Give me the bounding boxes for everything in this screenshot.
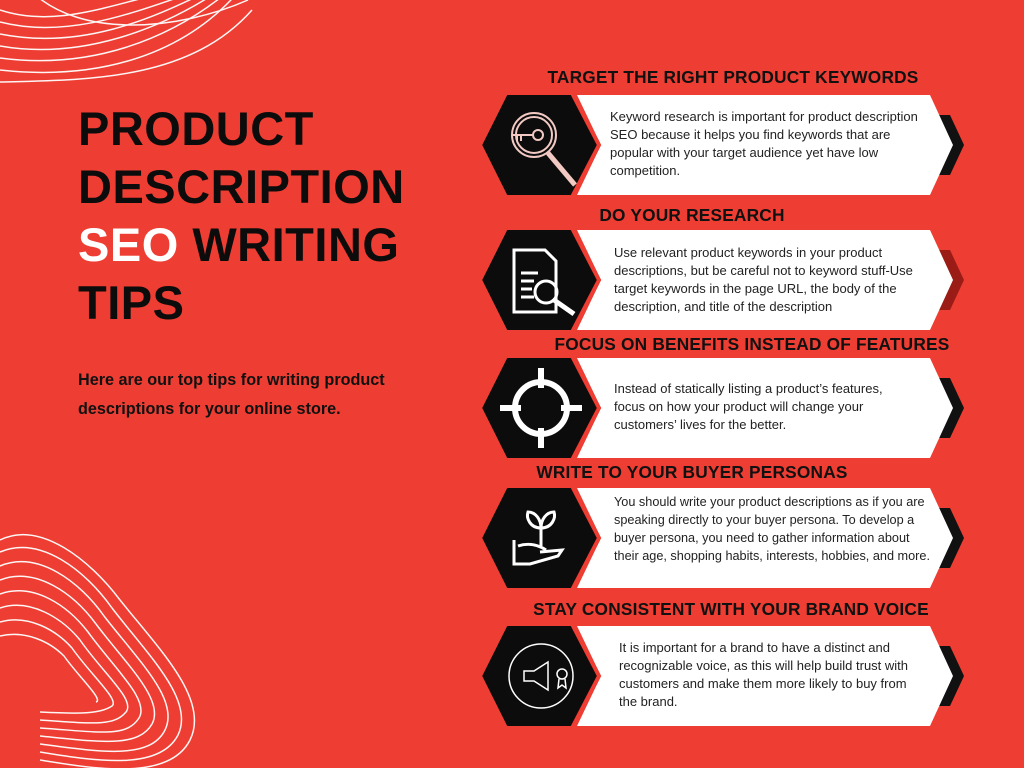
text 3: Instead of statically listing a product’s features, focus on how your product will change your customers’ lives for the better. <box>614 381 883 432</box>
text 2: Use relevant product keywords in your product descriptions, but be careful not to keyword stuff-Use target keywords in the page URL, the body of the description, and title of the description <box>614 245 913 314</box>
card 2 <box>480 228 964 332</box>
card 1 <box>480 93 964 197</box>
title: SEO WRITING <box>78 218 399 271</box>
icon: target <box>500 368 582 448</box>
title: DESCRIPTION <box>78 160 405 213</box>
card 5 <box>480 624 964 728</box>
heading 1: TARGET THE RIGHT PRODUCT KEYWORDS <box>547 67 919 87</box>
title: PRODUCT <box>78 102 314 155</box>
icon: hand plant <box>514 512 562 564</box>
text 4: You should write your product descriptions as if you are speaking directly to your buyer persona. To develop a buyer persona, you need to gather information about their age, shopping habits, interests, hobbies, and more. <box>614 495 930 563</box>
icon: document search <box>514 250 574 314</box>
title: TIPS <box>78 276 184 329</box>
icon: megaphone badge <box>509 644 573 708</box>
heading 3: FOCUS ON BENEFITS INSTEAD OF FEATURES <box>555 334 949 354</box>
title <box>78 102 405 329</box>
heading 2: DO YOUR RESEARCH <box>599 205 785 225</box>
icon: key magnifier <box>512 113 575 185</box>
subtitle: Here are our top tips for writing product descriptions for your online store. <box>78 371 385 418</box>
card 3 <box>480 356 964 460</box>
text 5: It is important for a brand to have a distinct and recognizable voice, as this will help build trust with customers and make them more likely to buy from the brand. <box>619 640 908 709</box>
heading 4: WRITE TO YOUR BUYER PERSONAS <box>536 462 848 482</box>
text 1: Keyword research is important for product description SEO because it helps you find keywords that are popular with your target audience yet have low competition. <box>610 109 918 178</box>
card 4 <box>480 486 964 590</box>
heading 5: STAY CONSISTENT WITH YOUR BRAND VOICE <box>533 599 929 619</box>
